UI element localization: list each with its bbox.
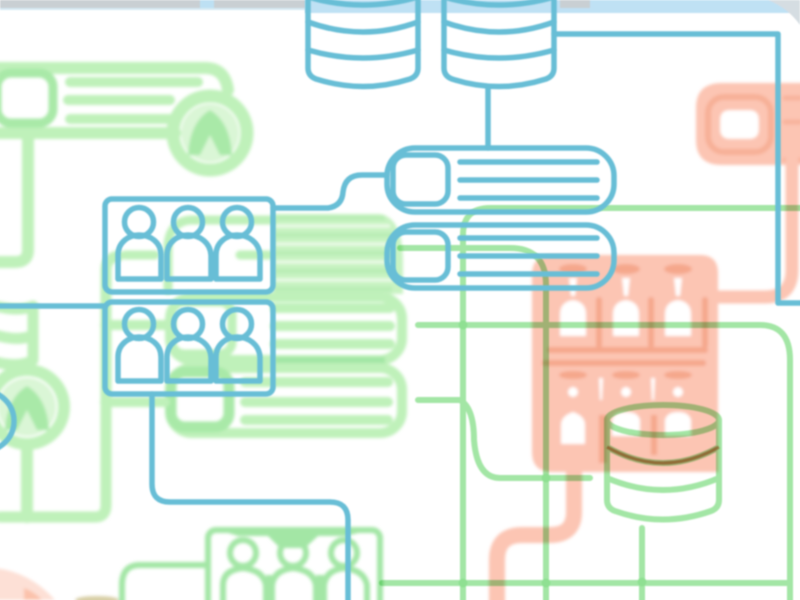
green loop connector left [0,256,118,517]
green database left [0,306,33,365]
green thin lines layer [382,208,800,600]
green card top left [0,68,228,133]
salmon connector bottom [497,470,574,600]
green card lower [170,368,402,433]
green avatar circle left [0,370,64,444]
green network line middle [418,325,790,600]
blue connector database to card [485,88,491,148]
green layer [0,68,403,600]
blue database left [308,0,418,86]
green stem left [21,445,33,517]
blue connector people to card [273,175,387,208]
green bars under people [105,325,165,402]
salmon connector right [712,160,792,297]
salmon blob bottom left [0,568,119,600]
network nodes [458,320,646,588]
green network line curve [400,248,546,600]
green network line top [463,208,800,600]
blue connector people to bottom [152,394,348,600]
salmon people box upper [532,255,718,360]
green network line bottom [382,580,790,586]
green connector bottom left [122,565,207,600]
blue card lower [387,225,614,288]
green people box bottom [208,530,380,600]
blue card upper [387,148,614,212]
blue database right [444,0,554,86]
green connector top left [0,135,28,262]
blue connector left [0,303,105,309]
green avatar circle top left [173,96,247,170]
green card middle [170,297,402,362]
blue connector top right [554,34,800,303]
blue people box upper [105,199,273,292]
green network line branch [418,400,590,478]
blue arc left [0,391,14,451]
top edge band [0,0,800,25]
green card upper [125,214,403,294]
green stem under database [639,528,645,600]
salmon card top right [696,83,800,165]
blue people box lower [105,302,273,394]
green database [607,405,719,520]
salmon people box lower [532,360,718,472]
